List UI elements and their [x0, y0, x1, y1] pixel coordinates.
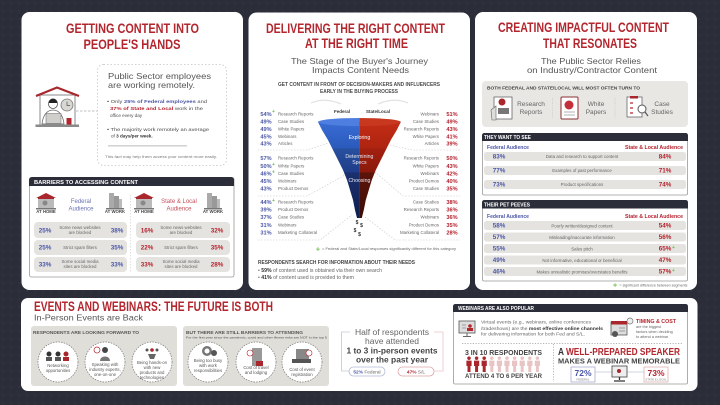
stat: 3 in 10 respondents: 3 IN 10 RESPONDENTS	[465, 348, 542, 357]
panel: they want to see	[482, 133, 688, 195]
peeve row: not informative: 49%	[493, 257, 506, 264]
list: choosing state and local: Product Demos	[409, 222, 440, 228]
peeve row: unrealistic promises: Makes unrealistic promises/overstates benefits	[536, 269, 628, 274]
want row: past performance: 77%	[493, 168, 506, 174]
peeve row: poorly written: 58%	[493, 223, 506, 230]
list: determining specs federal: 45%	[260, 179, 272, 185]
stat box: federal 72%: FEDERAL	[577, 378, 590, 382]
circle: too busy	[188, 342, 228, 382]
list: determining specs federal: 43%	[260, 186, 272, 192]
callout: working remotely: • The majority work remotely an average	[107, 127, 210, 132]
list: choosing state and local: Marketing Collateral	[400, 230, 439, 235]
title: creating impactful content	[498, 19, 669, 51]
list: choosing federal	[260, 198, 317, 236]
title: getting content	[66, 20, 199, 52]
list: choosing state and local: 35%	[446, 223, 458, 229]
label: research reports: Research	[517, 101, 545, 108]
barrier row: news websites: are blocked	[170, 230, 193, 235]
icon: at home federal	[36, 193, 56, 214]
list: exploring state and local: 49%	[446, 120, 458, 126]
barrier row: social media: sites are blocked	[64, 264, 97, 269]
text block: respondents search: RESPONDENTS SEARCH FOR INFORMATION ABOUT THEIR NEEDS	[258, 260, 415, 266]
title: delivering: DELIVERING THE RIGHT CONTENT	[266, 20, 445, 36]
stat box: state and local 73%: STATE & LOCAL	[645, 378, 667, 382]
label: state and local audience: State & Local	[161, 199, 197, 205]
circle: registration cost: registration	[291, 372, 313, 377]
list: choosing federal: 39%	[260, 208, 272, 214]
funnel: $	[354, 228, 357, 234]
funnel: State/Local	[366, 109, 390, 114]
list: choosing federal: 44%	[260, 200, 272, 206]
barrier row: social media: Some social media	[162, 259, 200, 264]
icon: research reports	[491, 97, 512, 120]
icon: person working at home	[36, 88, 79, 127]
peeve row: sales pitch: +	[672, 245, 675, 251]
peeve row: not informative: 47%	[659, 257, 672, 264]
barrier row: news websites: Some news websites	[160, 225, 202, 230]
panel: barriers to attending: For the first year since the pandemic, covid and other illness risks are NOT in the top 5	[186, 336, 327, 340]
list: choosing federal: Product Demos	[278, 207, 309, 212]
pill: federal: 52% Federal	[353, 370, 381, 376]
list: exploring state and local: 39%	[446, 142, 458, 148]
list: determining specs state and local: 42%	[446, 172, 458, 178]
circle: travel cost	[236, 342, 276, 382]
funnel	[318, 109, 401, 238]
list: determining specs state and local: Product Demos	[409, 178, 440, 184]
barrier row: news websites: 38%	[111, 228, 124, 234]
text block: virtual events: /tradeshows) are the most effective online channels	[481, 326, 604, 331]
peeve row: not informative	[484, 256, 686, 264]
stat: well-prepared speaker: MAKES A WEBINAR MEMORABLE	[558, 356, 680, 366]
stage dividers	[258, 143, 460, 240]
icon: calendar and clock	[611, 318, 633, 337]
subtitle: public sector relies	[527, 56, 658, 75]
list: choosing federal: Case Studies	[278, 214, 305, 220]
list: determining specs state and local: 50%	[446, 156, 458, 162]
list: exploring federal: White Papers	[278, 126, 305, 132]
text block: timing and cost: TIMING & COST	[636, 319, 677, 325]
circle: registration cost: Cost of event	[289, 367, 315, 372]
label: research reports: Reports	[520, 109, 543, 116]
barrier row: news websites	[34, 222, 230, 238]
barrier row: spam filters: Strict spam filters	[164, 245, 199, 250]
stat: 3 in 10 respondents: ATTEND 4 TO 6 PER YEAR	[465, 373, 542, 380]
peeve row: not informative: Not informative, educational or beneficial	[542, 258, 622, 263]
icon: at work state: AT WORK	[203, 209, 224, 214]
panel: most often turn to	[482, 81, 688, 127]
pill: state and local: 47% S/L	[407, 370, 425, 376]
icon: at home federal: AT HOME	[36, 209, 56, 214]
barrier row: news websites: 16%	[141, 228, 154, 234]
peeve row: poorly written	[484, 221, 686, 230]
peeve row: sales pitch: 55%	[493, 246, 506, 253]
list: determining specs federal: Case Studies	[278, 171, 305, 176]
list: determining specs state and local	[404, 156, 458, 192]
want row: past performance	[484, 166, 686, 175]
label: state and local audience: Audience	[166, 206, 192, 212]
heading: their pet peeves: THEIR PET PEEVES	[484, 202, 530, 208]
callout: working remotely: • Only 25% of Federal employees and	[107, 99, 208, 104]
list: exploring federal: 45%	[260, 134, 272, 140]
peeve row: misleading: Misleading/inaccurate information	[549, 235, 615, 240]
list: choosing federal: 31%	[260, 230, 272, 236]
circle: hands-on	[132, 342, 172, 382]
subheading: get content in front: GET CONTENT IN FRONT OF DECISION-MAKERS AND INFLUENCERS	[278, 82, 441, 88]
barrier row: spam filters	[34, 240, 230, 255]
text block: timing and cost: to attend a webinar	[636, 335, 669, 339]
callout: working remotely: office every day	[110, 113, 143, 118]
list: exploring state and local: Case Studies	[413, 119, 440, 124]
text block: timing and cost	[636, 319, 677, 339]
panel: most often turn to: BOTH FEDERAL AND STATE/LOCAL WILL MOST OFTEN TURN TO	[487, 86, 640, 90]
title: events and webinars: EVENTS AND WEBINARS: THE FUTURE IS BOTH	[34, 298, 273, 314]
note: significance legend: = Federal and State/Local responses significantly different for this category	[322, 246, 456, 251]
title: getting content: PEOPLE'S HANDS	[84, 36, 180, 52]
title: creating impactful content: CREATING IMPACTFUL CONTENT	[498, 19, 669, 35]
label: case studies: Studies	[651, 109, 674, 116]
stat box: federal 72%: 72%	[574, 368, 592, 378]
label: white papers: White	[588, 101, 604, 108]
peeve row: misleading	[484, 232, 686, 242]
list: exploring federal: Case Studies	[278, 119, 305, 124]
circle: speaking with experts: Speaking with	[92, 362, 119, 367]
heading: webinars: WEBINARS ARE ALSO POPULAR	[458, 306, 534, 312]
icon: at work federal: AT WORK	[105, 209, 126, 214]
column labels: State & Local Audience	[625, 214, 683, 220]
peeve row: sales pitch: Sales pitch	[571, 246, 593, 251]
circle: hands-on: with new	[144, 365, 161, 370]
list: determining specs state and local: Webinars	[421, 171, 440, 176]
list: determining specs state and local: 40%	[446, 179, 458, 185]
callout: half of respondents	[342, 328, 443, 376]
list: determining specs federal: +	[272, 162, 275, 168]
list: exploring federal: Webinars	[278, 134, 297, 139]
list: exploring federal: Articles	[278, 141, 293, 146]
text block: virtual events: Virtual events (e.g., webinars, online conferences	[481, 320, 592, 324]
funnel: Exploring	[349, 135, 370, 141]
icon: at work state	[203, 193, 224, 214]
text block: timing and cost: factors when deciding	[636, 330, 673, 334]
stat: well-prepared speaker: A WELL-PREPARED SPEAKER	[558, 347, 681, 358]
want row: product specifications	[484, 180, 686, 189]
want row: product specifications: 73%	[493, 182, 506, 188]
list: choosing federal: +	[272, 198, 275, 204]
column labels: Federal Audience	[487, 214, 529, 220]
list: exploring state and local: 41%	[446, 134, 458, 140]
list: exploring state and local: Webinars	[421, 112, 440, 116]
subheading: get content in front	[278, 82, 441, 95]
barrier row: news websites: are blocked	[69, 230, 92, 235]
callout: working remotely: 37% of State and Local work in the	[110, 106, 204, 111]
panel: delivering the right content	[248, 12, 470, 290]
barrier row: news websites: 32%	[211, 228, 224, 234]
circle: speaking with experts: one-on-one	[94, 372, 117, 377]
panel: barriers to attending: BUT THERE ARE STILL BARRIERS TO ATTENDING	[186, 330, 303, 336]
circle: networking: Networking	[47, 363, 69, 368]
subheading: get content in front: EARLY IN THE BUYING PROCESS	[320, 89, 399, 95]
note: significance legend	[316, 244, 456, 254]
list: choosing state and local: Case Studies	[413, 200, 440, 204]
peeve row: sales pitch	[484, 244, 686, 253]
callout: working remotely: of 3 days/per week.	[111, 134, 153, 138]
peeve row: misleading: 57%	[493, 234, 506, 241]
want row: data and research: 83%	[493, 154, 506, 160]
circle: networking	[38, 342, 78, 382]
list: exploring state and local: Research Reports	[404, 126, 440, 132]
list: exploring state and local: 51%	[446, 112, 458, 118]
list: determining specs state and local: Case Studies	[413, 186, 440, 191]
icon: at work federal	[105, 193, 126, 214]
panel: barriers to accessing content	[29, 177, 234, 277]
funnel: Determining	[345, 154, 373, 160]
list: choosing state and local: Webinars	[421, 214, 440, 220]
callout: working remotely: This fact may help them access your content more easily.	[105, 154, 217, 159]
list: determining specs federal	[260, 156, 314, 192]
subtitle: in-person events: In-Person Events are Back	[34, 313, 144, 323]
list: determining specs state and local: 43%	[446, 164, 458, 170]
column labels	[487, 214, 683, 220]
list: determining specs federal: Webinars	[278, 178, 297, 184]
want row: product specifications: 74%	[659, 182, 672, 188]
barrier row: spam filters: 25%	[39, 244, 52, 252]
list: exploring federal: +	[272, 109, 275, 115]
list: determining specs federal: +	[272, 170, 275, 176]
subtitle: buyer's journey: The Stage of the Buyer's Journey	[291, 56, 429, 66]
funnel: $	[360, 223, 363, 229]
text block: respondents search: • 59% of content used is obtained via their own search	[258, 268, 382, 274]
callout: half of respondents: have attended	[365, 337, 419, 346]
list: exploring federal	[260, 109, 314, 148]
note: significant difference	[613, 282, 688, 290]
barrier row: spam filters: 35%	[211, 244, 224, 252]
circle: hands-on: Being hands-on	[137, 360, 168, 365]
stat box: state and local 73%	[644, 367, 668, 382]
list: choosing federal: Marketing Collateral	[278, 230, 317, 235]
panel: creating impactful content	[475, 12, 697, 290]
circle: hands-on: technologies	[140, 375, 164, 380]
list: choosing state and local: 28%	[446, 230, 458, 236]
list: exploring federal: 49%	[260, 120, 272, 126]
label: white papers: Papers	[586, 109, 607, 116]
list: choosing federal: Webinars	[278, 222, 297, 228]
barrier row: spam filters: 22%	[141, 244, 154, 252]
column labels: Federal Audience	[487, 145, 529, 151]
circle: hands-on: products and	[140, 370, 165, 375]
panel: looking forward to: RESPONDENTS ARE LOOKING FORWARD TO	[33, 330, 139, 336]
list: determining specs federal: 46%	[260, 172, 272, 178]
circle: travel cost: and lodging	[245, 370, 268, 375]
list: choosing federal: 31%	[260, 223, 272, 229]
callout: working remotely: are working remotely.	[108, 80, 195, 90]
want row: data and research: Data and research to support content	[546, 154, 619, 159]
panel: webinars are also popular	[453, 304, 688, 384]
barrier row: social media: 33%	[39, 262, 52, 268]
callout: working remotely	[98, 64, 226, 166]
funnel: Federal	[334, 109, 350, 114]
funnel: $	[358, 232, 361, 238]
circle: speaking with experts: industry experts,	[89, 367, 121, 372]
text block: virtual events: for delivering information for both Fed and S/L.	[481, 332, 585, 336]
peeve row: unrealistic promises: 57%	[659, 269, 672, 276]
barrier row: social media	[34, 257, 230, 272]
icon: at home state: AT HOME	[134, 209, 154, 214]
barrier row: social media: Some social media	[61, 259, 99, 264]
label: case studies: Case	[654, 101, 670, 108]
barrier row: news websites: 25%	[39, 228, 52, 234]
peeve row: poorly written: Poorly written/designed content	[551, 223, 613, 228]
text block: respondents search: • 41% of content used is provided to them	[258, 275, 354, 281]
list: determining specs federal: Product Demos	[278, 186, 309, 191]
funnel: $	[356, 220, 359, 226]
list: choosing state and local: Research Reports	[404, 207, 440, 212]
list: exploring federal: 43%	[260, 142, 272, 148]
list: determining specs federal: 57%	[260, 156, 272, 162]
callout: working remotely: Public Sector employees	[108, 71, 211, 81]
callout: half of respondents: Half of respondents	[355, 328, 429, 337]
barrier row: spam filters: Strict spam filters	[63, 245, 98, 250]
circle: too busy: with work	[199, 363, 218, 368]
list: determining specs state and local: White Papers	[413, 164, 440, 168]
list: determining specs state and local: 35%	[446, 186, 458, 192]
text block: timing and cost: are the biggest	[636, 325, 662, 329]
panel: events and webinars	[21, 298, 698, 391]
list: exploring state and local	[404, 112, 458, 148]
label: federal audience: Federal	[71, 199, 91, 205]
list: choosing federal: Research Reports	[278, 200, 314, 204]
want row: data and research	[484, 152, 686, 161]
icon: white papers	[561, 97, 578, 119]
title: delivering: AT THE RIGHT TIME	[305, 35, 408, 51]
barrier row: news websites: Some news websites	[59, 225, 101, 230]
stat box: state and local 73%: 73%	[647, 368, 665, 378]
column labels: State & Local Audience	[625, 145, 683, 151]
list: choosing state and local	[400, 200, 458, 236]
list: exploring state and local: Articles	[425, 141, 440, 146]
list: choosing state and local: 36%	[446, 215, 458, 221]
circle: too busy: Being too busy	[194, 358, 223, 363]
list: exploring federal: 54%	[260, 112, 272, 118]
list: determining specs state and local: Research Reports	[404, 156, 440, 160]
want row: past performance: 71%	[659, 168, 672, 174]
peeve row: misleading: 56%	[659, 234, 672, 241]
title: creating impactful content: THAT RESONATES	[543, 35, 637, 51]
text block: respondents search	[258, 260, 415, 281]
panel: looking forward to	[31, 326, 177, 386]
note: significant difference: +	[613, 282, 617, 290]
funnel: Choosing	[348, 178, 370, 184]
peeve row: poorly written: 54%	[659, 223, 672, 230]
note: significance legend: +	[316, 244, 321, 254]
panel: barriers to attending	[183, 326, 329, 386]
peeve row: unrealistic promises: 46%	[493, 269, 506, 276]
title: getting content: GETTING CONTENT INTO	[66, 20, 199, 36]
subtitle: buyer's journey	[291, 56, 429, 75]
callout: half of respondents: 1 to 3 in-person events	[346, 346, 438, 356]
list: exploring state and local: White Papers	[413, 134, 440, 139]
circle: networking: opportunities	[46, 368, 70, 373]
list: choosing federal: 37%	[260, 215, 272, 221]
heading: they want to see: THEY WANT TO SEE	[484, 135, 531, 141]
connector line	[76, 110, 97, 112]
want row: product specifications: Product specifications	[561, 182, 604, 187]
peeve row: unrealistic promises: +	[672, 268, 675, 274]
label: federal audience: Audience	[68, 206, 94, 212]
icon: speaker monitor	[612, 366, 627, 381]
circle: travel cost: Cost of travel	[243, 365, 269, 370]
list: choosing state and local: 36%	[446, 208, 458, 214]
icon: ten people	[466, 356, 540, 372]
stat box: federal 72%	[571, 367, 595, 382]
subtitle: public sector relies: The Public Sector Relies	[541, 56, 641, 66]
list: exploring state and local: 43%	[446, 127, 458, 133]
subtitle: buyer's journey: Impacts Content Needs	[312, 65, 409, 75]
list: determining specs federal: 50%	[260, 164, 272, 170]
barrier row: social media: 33%	[111, 262, 124, 268]
peeve row: sales pitch: 65%	[659, 246, 672, 253]
list: determining specs federal: Research Reports	[278, 156, 314, 160]
panel: getting content into people's hands	[22, 12, 243, 290]
text block: virtual events	[481, 320, 604, 336]
list: exploring federal: Research Reports	[278, 112, 314, 116]
icon: at home state	[134, 193, 154, 214]
icon: monitor	[459, 321, 475, 336]
list: exploring federal: 49%	[260, 127, 272, 133]
barrier row: social media: 33%	[141, 262, 154, 268]
subtitle: public sector relies: on Industry/Contractor Content	[527, 65, 658, 75]
panel: their pet peeves	[482, 200, 688, 281]
barrier row: social media: 28%	[211, 262, 224, 268]
circle: speaking with experts	[85, 342, 125, 382]
list: determining specs federal: White Papers	[278, 164, 305, 168]
arrows into funnel	[311, 100, 408, 104]
want row: past performance: Examples of past performance	[552, 168, 612, 173]
barrier row: social media: sites are blocked	[165, 264, 198, 269]
funnel: Specs	[352, 160, 367, 166]
callout: half of respondents: over the past year	[356, 356, 428, 364]
column labels	[487, 145, 683, 151]
stat: 3 in 10 respondents	[465, 348, 542, 380]
peeve row: unrealistic promises	[484, 267, 686, 276]
want row: data and research: 84%	[659, 154, 672, 160]
note: significant difference: = significant difference between segments	[620, 284, 688, 288]
heading: barriers: BARRIERS TO ACCESSING CONTENT	[34, 180, 139, 186]
barrier row: spam filters: 35%	[111, 244, 124, 252]
circle: registration cost	[282, 342, 322, 382]
list: choosing state and local: 38%	[446, 200, 458, 206]
title: delivering	[266, 20, 445, 51]
stat: well-prepared speaker	[558, 347, 681, 382]
icon: case studies	[627, 96, 648, 117]
circle: too busy: responsibilities	[194, 368, 222, 373]
